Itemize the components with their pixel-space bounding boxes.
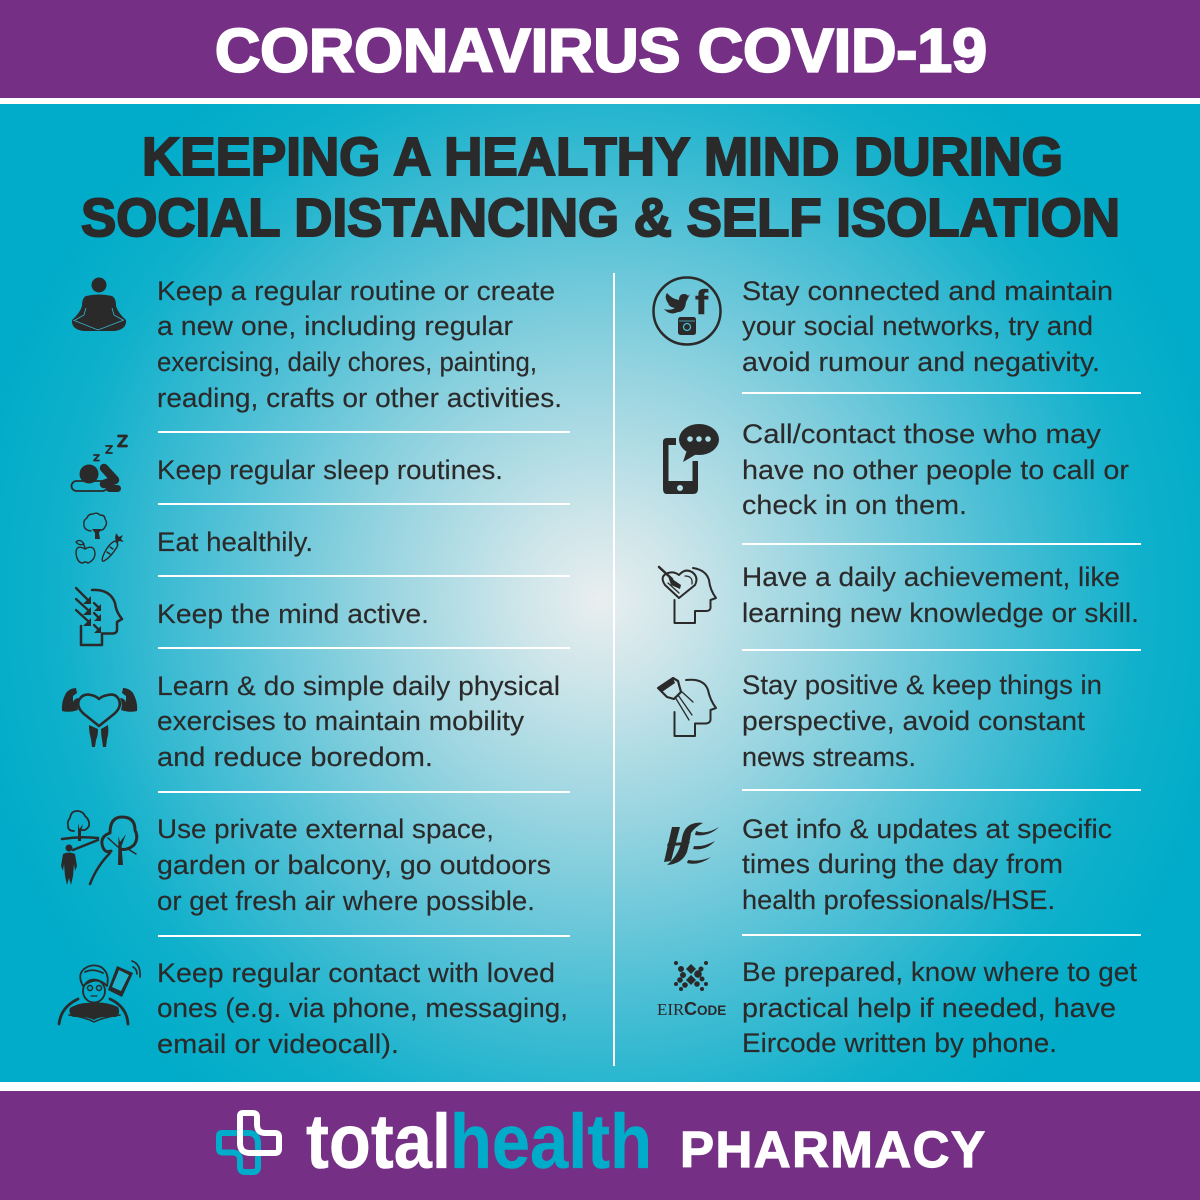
text: exercise: and reduce boredom. — [157, 742, 433, 772]
icon: Eircode logo — [657, 961, 726, 1019]
text: Eircode — [742, 957, 1138, 1058]
icon: HSE logo — [664, 823, 719, 865]
text: positive: Stay positive & keep things in — [742, 670, 1102, 700]
text: routine: exercising, daily chores, painting, — [157, 347, 537, 377]
text: achievement: learning new knowledge or skill. — [742, 598, 1139, 628]
text: food: Eat healthily. — [157, 527, 313, 557]
panel: footer banner: PHARMACY — [680, 1121, 985, 1178]
text: Eircode: Be prepared, know where to get — [742, 957, 1138, 987]
text: outdoors: or get fresh air where possible. — [157, 886, 535, 916]
icon: healthy food — [76, 513, 124, 563]
text: HSE: health professionals/HSE. — [742, 885, 1055, 915]
panel: footer banner — [0, 1091, 1200, 1200]
text: Eircode: Eircode written by phone. — [742, 1028, 1057, 1058]
text: social — [742, 276, 1113, 377]
text: Eircode: practical help if needed, have — [742, 993, 1116, 1023]
icon: social media — [654, 278, 720, 344]
text: exercise: Learn & do simple daily physical — [157, 671, 560, 701]
icon: Eircode logo: C — [684, 999, 697, 1019]
icon: social media: f — [695, 284, 709, 322]
text: call — [742, 419, 1129, 520]
text: call: check in on them. — [742, 490, 967, 520]
text: social: avoid rumour and negativity. — [742, 347, 1100, 377]
text: HSE: Get info & updates at specific — [742, 814, 1112, 844]
text: contact: email or videocall). — [157, 1029, 399, 1059]
text: routine: a new one, including regular — [157, 311, 513, 341]
text: contact: ones (e.g. via phone, messaging, — [157, 993, 568, 1023]
icon: muscular heart — [62, 688, 137, 747]
heading — [81, 127, 1120, 248]
icon: pharmacy cross logo — [219, 1113, 279, 1172]
text: outdoors — [157, 814, 551, 916]
icon: positive head — [658, 678, 716, 736]
text: routine — [157, 276, 562, 413]
panel: top banner — [0, 0, 1200, 98]
text: mind: Keep the mind active. — [157, 599, 429, 629]
text: social: your social networks, try and — [742, 311, 1093, 341]
icon: relaxing with phone — [59, 961, 140, 1024]
icon: Eircode logo: ODE — [697, 1003, 726, 1018]
icon: outdoors — [61, 811, 137, 885]
text: HSE: times during the day from — [742, 849, 1063, 879]
text: call: Call/contact those who may — [742, 419, 1102, 449]
text: positive: news streams. — [742, 742, 916, 772]
icon: phone with speech bubble — [663, 424, 719, 494]
text: exercise: exercises to maintain mobility — [157, 706, 525, 736]
text: call: have no other people to call or — [742, 455, 1129, 485]
icon: meditation — [72, 278, 126, 331]
text: contact — [157, 958, 568, 1059]
text: positive — [742, 670, 1102, 772]
icon: sleeping person — [72, 436, 126, 492]
logo wordmark: total — [306, 1099, 451, 1185]
heading: SOCIAL DISTANCING & SELF ISOLATION — [81, 188, 1120, 248]
text: HSE — [742, 814, 1112, 915]
text: achievement — [742, 562, 1139, 628]
icon: active mind head — [76, 588, 122, 645]
icon: Eircode logo: EIR — [657, 1000, 685, 1019]
icon: achievement head — [659, 567, 716, 623]
text: sleep: Keep regular sleep routines. — [157, 455, 503, 485]
text: routine: reading, crafts or other activities. — [157, 383, 562, 413]
text: contact: Keep regular contact with loved — [157, 958, 555, 988]
text: outdoors: Use private external space, — [157, 814, 494, 844]
text: outdoors: garden or balcony, go outdoors — [157, 850, 551, 880]
text: positive: perspective, avoid constant — [742, 706, 1086, 736]
text: social: Stay connected and maintain — [742, 276, 1113, 306]
text: exercise — [157, 671, 560, 772]
title: CORONAVIRUS COVID-19 — [215, 16, 987, 84]
heading: KEEPING A HEALTHY MIND DURING — [142, 127, 1063, 187]
panel: footer banner: health — [450, 1099, 652, 1185]
text: routine: Keep a regular routine or create — [157, 276, 555, 306]
text: achievement: Have a daily achievement, like — [742, 562, 1120, 592]
